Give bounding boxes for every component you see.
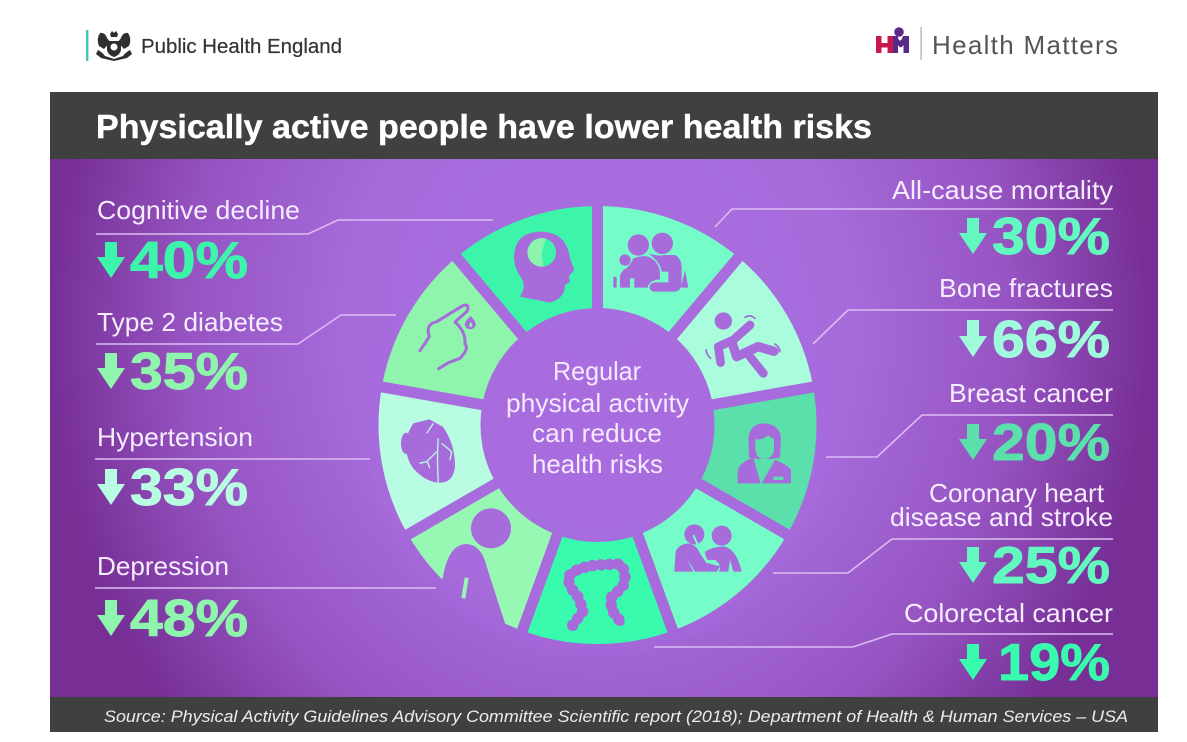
remaining icons in wheel coordinates <box>401 232 625 625</box>
stat: colorectal cancer: Colorectal cancer <box>904 598 1113 628</box>
centre text <box>506 356 689 479</box>
icon: woman doctor <box>738 423 791 483</box>
stat: all-cause mortality: 30% <box>992 208 1110 266</box>
icon: family <box>613 233 688 292</box>
centre text: physical activity <box>506 388 689 418</box>
icon: royal crest <box>96 31 132 61</box>
stat: bone fractures: Bone fractures <box>939 273 1113 303</box>
source footer: Source: Physical Activity Guidelines Advisory Committee Scientific report (2018); Department of Health & Human Services – USA <box>104 708 1128 726</box>
icon: colon <box>568 564 625 625</box>
source footer <box>50 697 1158 732</box>
stat: hypertension: Hypertension <box>97 422 253 452</box>
icon: finger prick with drop <box>420 305 476 369</box>
stat: bone fractures <box>813 273 1113 369</box>
centre text: Regular <box>553 356 641 386</box>
stat: colorectal cancer: 19% <box>998 634 1110 692</box>
stat: depression <box>95 551 436 648</box>
icon: seated person with depression <box>463 508 511 598</box>
stat: type 2 diabetes: Type 2 diabetes <box>97 307 283 337</box>
icon: head with pie chart <box>514 232 574 303</box>
centre text: health risks <box>532 449 663 479</box>
logo: Public Health England: Public Health England <box>141 35 342 58</box>
stat: hypertension <box>95 422 370 517</box>
logo: Health Matters <box>876 27 1118 60</box>
title bar: Physically active people have lower health risks <box>96 108 872 145</box>
stat: coronary heart disease and stroke <box>773 478 1113 595</box>
stat: coronary heart disease and stroke: disease and stroke <box>890 502 1113 532</box>
stat: type 2 diabetes <box>96 307 396 401</box>
wheel of nine risk segments <box>378 206 816 644</box>
stat: type 2 diabetes: 35% <box>130 343 248 401</box>
stat: all-cause mortality <box>715 175 1113 266</box>
stat: coronary heart disease and stroke: Coronary heart <box>929 478 1105 508</box>
title bar <box>50 92 1158 159</box>
stat: depression: 48% <box>130 590 248 648</box>
stat: cognitive decline: 40% <box>130 232 248 290</box>
stat: depression: Depression <box>97 551 229 581</box>
stat: colorectal cancer <box>654 598 1113 692</box>
stat: breast cancer: 20% <box>992 414 1110 472</box>
stat: breast cancer: Breast cancer <box>949 378 1113 408</box>
logo: Public Health England <box>86 30 342 61</box>
icon: falling person <box>706 312 780 373</box>
panel: purple background <box>50 159 1158 698</box>
icon: anatomical heart <box>401 419 455 483</box>
stat: breast cancer <box>826 378 1113 472</box>
stat: all-cause mortality: All-cause mortality <box>892 175 1113 205</box>
stat: cognitive decline <box>96 195 493 290</box>
stat: cognitive decline: Cognitive decline <box>97 195 300 225</box>
icon: doctor with stethoscope <box>674 524 742 572</box>
stat: coronary heart disease and stroke: 25% <box>992 537 1110 595</box>
logo: Health Matters: Health Matters <box>932 30 1118 60</box>
centre text: can reduce <box>532 418 662 448</box>
stat: bone fractures: 66% <box>992 311 1110 369</box>
stat: hypertension: 33% <box>130 459 248 517</box>
